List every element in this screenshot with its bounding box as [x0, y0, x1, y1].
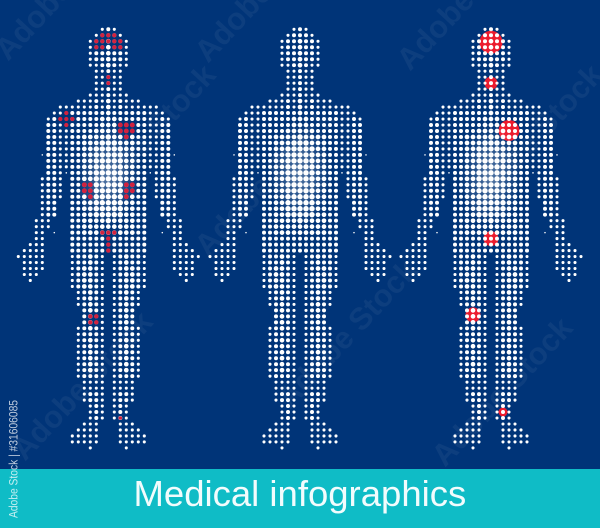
- figure: left body with red square-dot markers: [18, 29, 198, 448]
- title band: [0, 469, 600, 528]
- watermark: repeated Adobe Stock: Adobe Stock: [188, 100, 343, 263]
- watermark: repeated Adobe Stock: Adobe Stock: [68, 57, 223, 220]
- vertical stock credit: Adobe Stock | #31606085: [8, 400, 20, 518]
- marker: left abdomen dots: [84, 185, 90, 197]
- figure: right body with red glowing circles: [401, 29, 581, 448]
- watermark: repeated Adobe Stock: Adobe Stock: [5, 304, 160, 467]
- watermark: repeated Adobe Stock: Adobe Stock: [425, 310, 580, 473]
- marker: heart dots: [120, 125, 132, 137]
- white dots inside marker circles: [466, 30, 520, 416]
- marker: right lung dots: [60, 113, 72, 125]
- marker: ankle dot: [119, 416, 122, 420]
- title: Medical infographics: [134, 473, 466, 514]
- marker: brain dots: [96, 35, 120, 47]
- marker circles: [466, 31, 520, 417]
- marker: throat dots: [106, 77, 110, 83]
- watermark: repeated Adobe Stock: Adobe Stock: [270, 252, 425, 415]
- marker: knee dots: [90, 316, 96, 322]
- marker: right abdomen dots: [126, 185, 132, 197]
- marker: groin dots: [102, 233, 114, 251]
- figure: middle plain body: [210, 29, 390, 448]
